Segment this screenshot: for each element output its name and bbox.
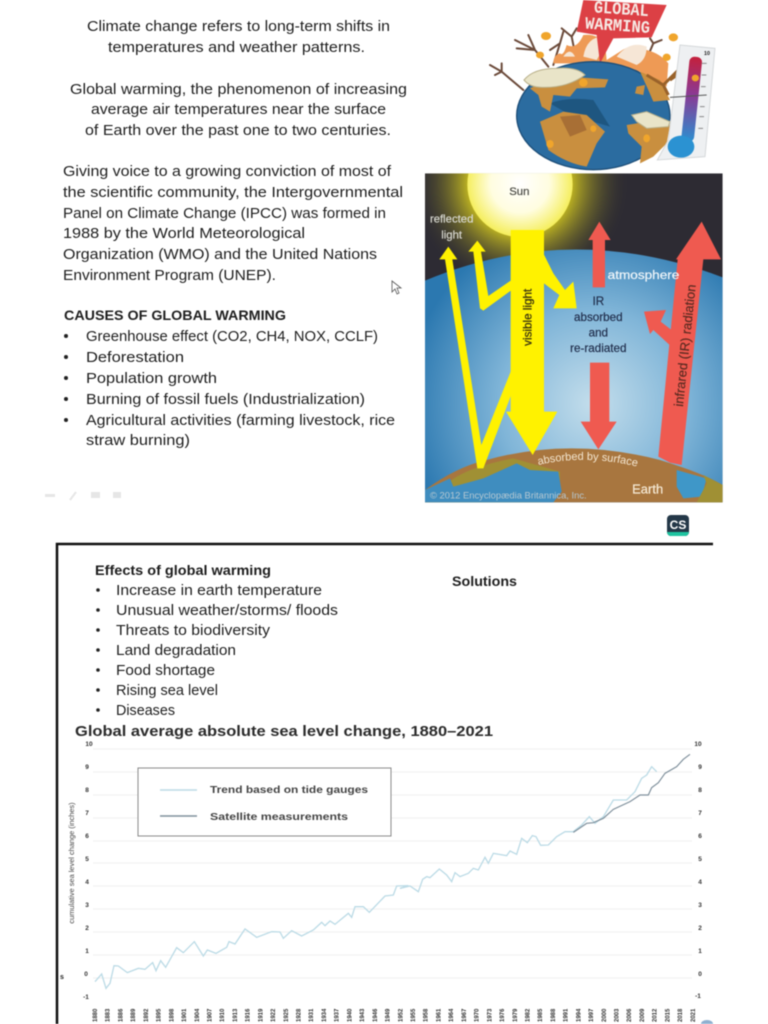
arrow: visible light [506,230,557,455]
list: effects: Land degradation [116,642,236,659]
text block: IPCC history: Organization (WMO) and the United Nations [63,246,377,263]
text block: IPCC history: 1988 by the World Meteorological [63,225,305,242]
x axis year labels: 1895 [157,1008,163,1022]
list: effects: Rising sea level [116,682,218,699]
x axis year labels: 1943 [360,1008,366,1022]
x axis year labels: 1907 [208,1008,214,1022]
background: space [424,172,724,282]
x axis year labels: 1970 [475,1008,481,1022]
list: causes [64,328,395,449]
list: causes: Agricultural activities (farming livestock, rice [86,412,395,429]
y axis left labels: 10 [85,741,93,748]
list: causes: Greenhouse effect (CO2, CH4, NOX, CCLF) [86,328,378,345]
heading: effects: Effects of global warming [95,562,271,578]
list: effects: Diseases [116,702,175,719]
label: infrared radiation: infrared (IR) radiation [671,284,699,407]
chart title: Global average absolute sea level change, 1880–2021 [75,723,493,740]
list: effects: Increase in earth temperature [116,582,322,599]
x axis year labels: 1901 [182,1008,188,1022]
x axis year labels: 1994 [576,1008,582,1022]
arrow: reflected light far left [439,247,514,468]
arrow: IR branch [644,309,672,345]
diagram: greenhouse effect [424,172,724,504]
y axis left labels: 4 [85,879,89,886]
label: IR absorbed and re-radiated: IR [593,295,604,308]
label: absorbed by surface: absorbed by surface [538,451,638,467]
y axis left labels [83,741,93,1001]
x axis year labels: 2006 [627,1008,633,1022]
y axis right labels: 9 [698,764,702,771]
x axis year labels: 1934 [322,1008,328,1022]
y axis right labels: 5 [698,856,702,863]
y axis right labels: 1 [698,948,702,955]
x axis year labels: 1991 [564,1008,570,1022]
x axis year labels: 2003 [614,1008,620,1022]
label: atmosphere: atmosphere [608,268,679,282]
x axis year labels: 2018 [678,1008,684,1022]
text block: global warming definition [70,81,407,139]
x axis year labels: 1889 [131,1008,137,1022]
icon: orange leaves [536,32,678,148]
y axis left labels: 9 [85,764,89,771]
label: visible light: visible light [522,288,535,346]
arrow: infrared radiation [658,222,721,465]
y axis left labels: 2 [85,925,89,932]
icon: flames [553,35,668,87]
text block: IPCC history: Panel on Climate Change (IPCC) was formed in [63,205,386,222]
x axis year labels: 2000 [602,1008,608,1022]
x axis year labels: 1892 [144,1008,150,1022]
x axis year labels: 1904 [195,1008,201,1022]
x axis year labels: 1940 [347,1008,353,1022]
x axis year labels: 1961 [436,1008,442,1022]
list: causes: Burning of fossil fuels (Industrialization) [86,391,365,408]
icon: bare trees [490,28,662,90]
x axis year labels: 1982 [526,1008,532,1022]
sign: global warming: WARMING [584,16,651,39]
x axis year labels: 1925 [284,1008,290,1022]
x axis year labels: 1898 [169,1008,175,1022]
x axis year labels: 1949 [386,1008,392,1022]
icon: orange leaf on thermometer [692,75,699,81]
x axis year labels: 1916 [246,1008,252,1022]
text block: global warming definition: of Earth over the past one to two centuries. [85,122,391,139]
text block: IPCC history: the scientific community, the Intergovernmental [63,184,403,201]
y axis right labels: 0 [698,971,702,978]
list: effects: Unusual weather/storms/ floods [116,602,338,619]
x axis year labels: 1964 [449,1008,455,1022]
heading: causes: CAUSES OF GLOBAL WARMING [64,307,286,323]
label: sun: Sun [509,186,529,198]
background: atmosphere [425,249,723,502]
y axis right labels: 4 [698,879,702,886]
sign: global warming [577,0,667,63]
icon: CamScanner badge: CS [670,518,686,532]
x axis year labels: 1955 [411,1008,417,1022]
x axis year labels: 1937 [335,1008,341,1022]
y axis left labels: 8 [85,787,89,794]
y axis right labels: 2 [698,925,702,932]
heading: solutions: Solutions [452,573,517,589]
x axis year labels: 1883 [106,1008,112,1022]
icon: bare tree on right [647,68,692,95]
x axis year labels [93,1008,697,1022]
x axis year labels: 1928 [296,1008,302,1022]
faint toolbar icons [45,492,121,500]
x axis year labels: 1985 [538,1008,544,1022]
illustration: global warming globe [490,0,715,170]
sun glow [426,172,616,264]
icon: earth globe [517,62,670,170]
list: causes: straw burning) [86,432,190,449]
line: tide gauges, left part [95,886,408,988]
label: IR absorbed and re-radiated: and [589,327,608,340]
y axis right labels: 8 [698,787,702,794]
line: satellite measurements [573,754,690,832]
x axis year labels: 1910 [220,1008,226,1022]
y axis left labels: 7 [85,810,89,817]
text block: global warming definition: average air temperatures near the surface [91,101,386,118]
line: tide gauges, right part [400,767,657,892]
x axis year labels: 1979 [513,1008,519,1022]
x axis year labels: 2021 [691,1008,697,1022]
y axis left labels: 1 [85,948,89,955]
icon: mouse cursor [392,281,401,294]
legend [138,768,391,836]
y axis left labels: 5 [85,856,89,863]
x axis year labels: 1880 [93,1008,99,1022]
y axis right labels: 10 [694,741,702,748]
chart: sea level change [60,741,702,1022]
legend: satellite: Satellite measurements [210,812,349,823]
x axis year labels: 1967 [462,1008,468,1022]
x axis year labels: 1973 [487,1008,493,1022]
y axis right labels [694,741,702,1000]
text block: IPCC history: Giving voice to a growing conviction of most of [63,163,392,180]
label: IR absorbed and re-radiated: re-radiated [570,342,627,355]
x axis year labels: 2009 [640,1008,646,1022]
arrow: visible light absorbed by atmosphere [542,250,577,308]
list: effects: Food shortage [116,662,215,679]
label: reflected light: reflected [430,214,473,226]
icon: blue dot at bottom edge [701,1020,713,1024]
sign: global warming: GLOBAL [593,0,649,22]
x axis year labels: 1886 [118,1008,124,1022]
y axis left labels: -1 [83,994,89,1001]
icon: skulls and bones [524,68,670,128]
label: IR absorbed and re-radiated: absorbed [574,311,623,324]
y axis left labels: 0 [84,971,88,978]
text block: IPCC history: Environment Program (UNEP). [63,267,276,284]
arrow: IR re-radiated down [581,363,617,449]
y axis right labels: 3 [698,902,702,909]
intro text: climate change definition: Climate change refers to long-term shifts in [87,18,390,35]
intro text: climate change definition: temperatures and weather patterns. [108,39,365,56]
panel: causes of global warming [64,307,395,449]
x axis year labels: 2012 [653,1008,659,1022]
frame of second slide [57,544,713,1024]
x axis year labels: 1919 [258,1008,264,1022]
x axis year labels: 1913 [233,1008,239,1022]
arrow: reflected light near [468,241,512,311]
y axis right labels: 7 [698,810,702,817]
text block: IPCC history [63,163,403,284]
intro text: climate change definition [87,18,390,56]
panel: effects of global warming [95,562,338,719]
y axis title: cumulative sea level change (inches) [67,802,76,924]
text block: global warming definition: Global warming, the phenomenon of increasing [70,81,407,98]
earth surface [425,448,723,502]
x axis year labels: 1952 [398,1008,404,1022]
icon: thermometer: 10 [704,51,710,57]
sun [466,172,574,236]
legend: tide gauges: Trend based on tide gauges [210,785,369,796]
label: reflected light: light [441,229,463,241]
icon: CamScanner badge [667,515,689,536]
y axis left labels: 6 [85,833,89,840]
icon: thermometer [657,45,715,160]
label: earth: Earth [632,481,663,496]
y axis right labels: -1 [695,993,701,1000]
x axis year labels: 1922 [271,1008,277,1022]
x axis year labels: 1946 [373,1008,379,1022]
tick mark near zero: s [60,974,64,981]
list: causes: Population growth [86,370,217,387]
list: effects [96,582,338,719]
y axis left labels: 3 [85,902,89,909]
x axis year labels: 1931 [309,1008,315,1022]
x axis year labels: 1976 [500,1008,506,1022]
x axis year labels: 2015 [665,1008,671,1022]
y axis right labels: 6 [698,833,702,840]
label: copyright: © 2012 Encyclopædia Britannica, Inc. [430,490,587,500]
list: causes: Deforestation [86,349,184,366]
arrow: IR up to space [588,222,611,287]
list: effects: Threats to biodiversity [116,622,271,639]
x axis year labels: 1997 [589,1008,595,1022]
x axis year labels: 1988 [551,1008,557,1022]
x axis year labels: 1958 [424,1008,430,1022]
